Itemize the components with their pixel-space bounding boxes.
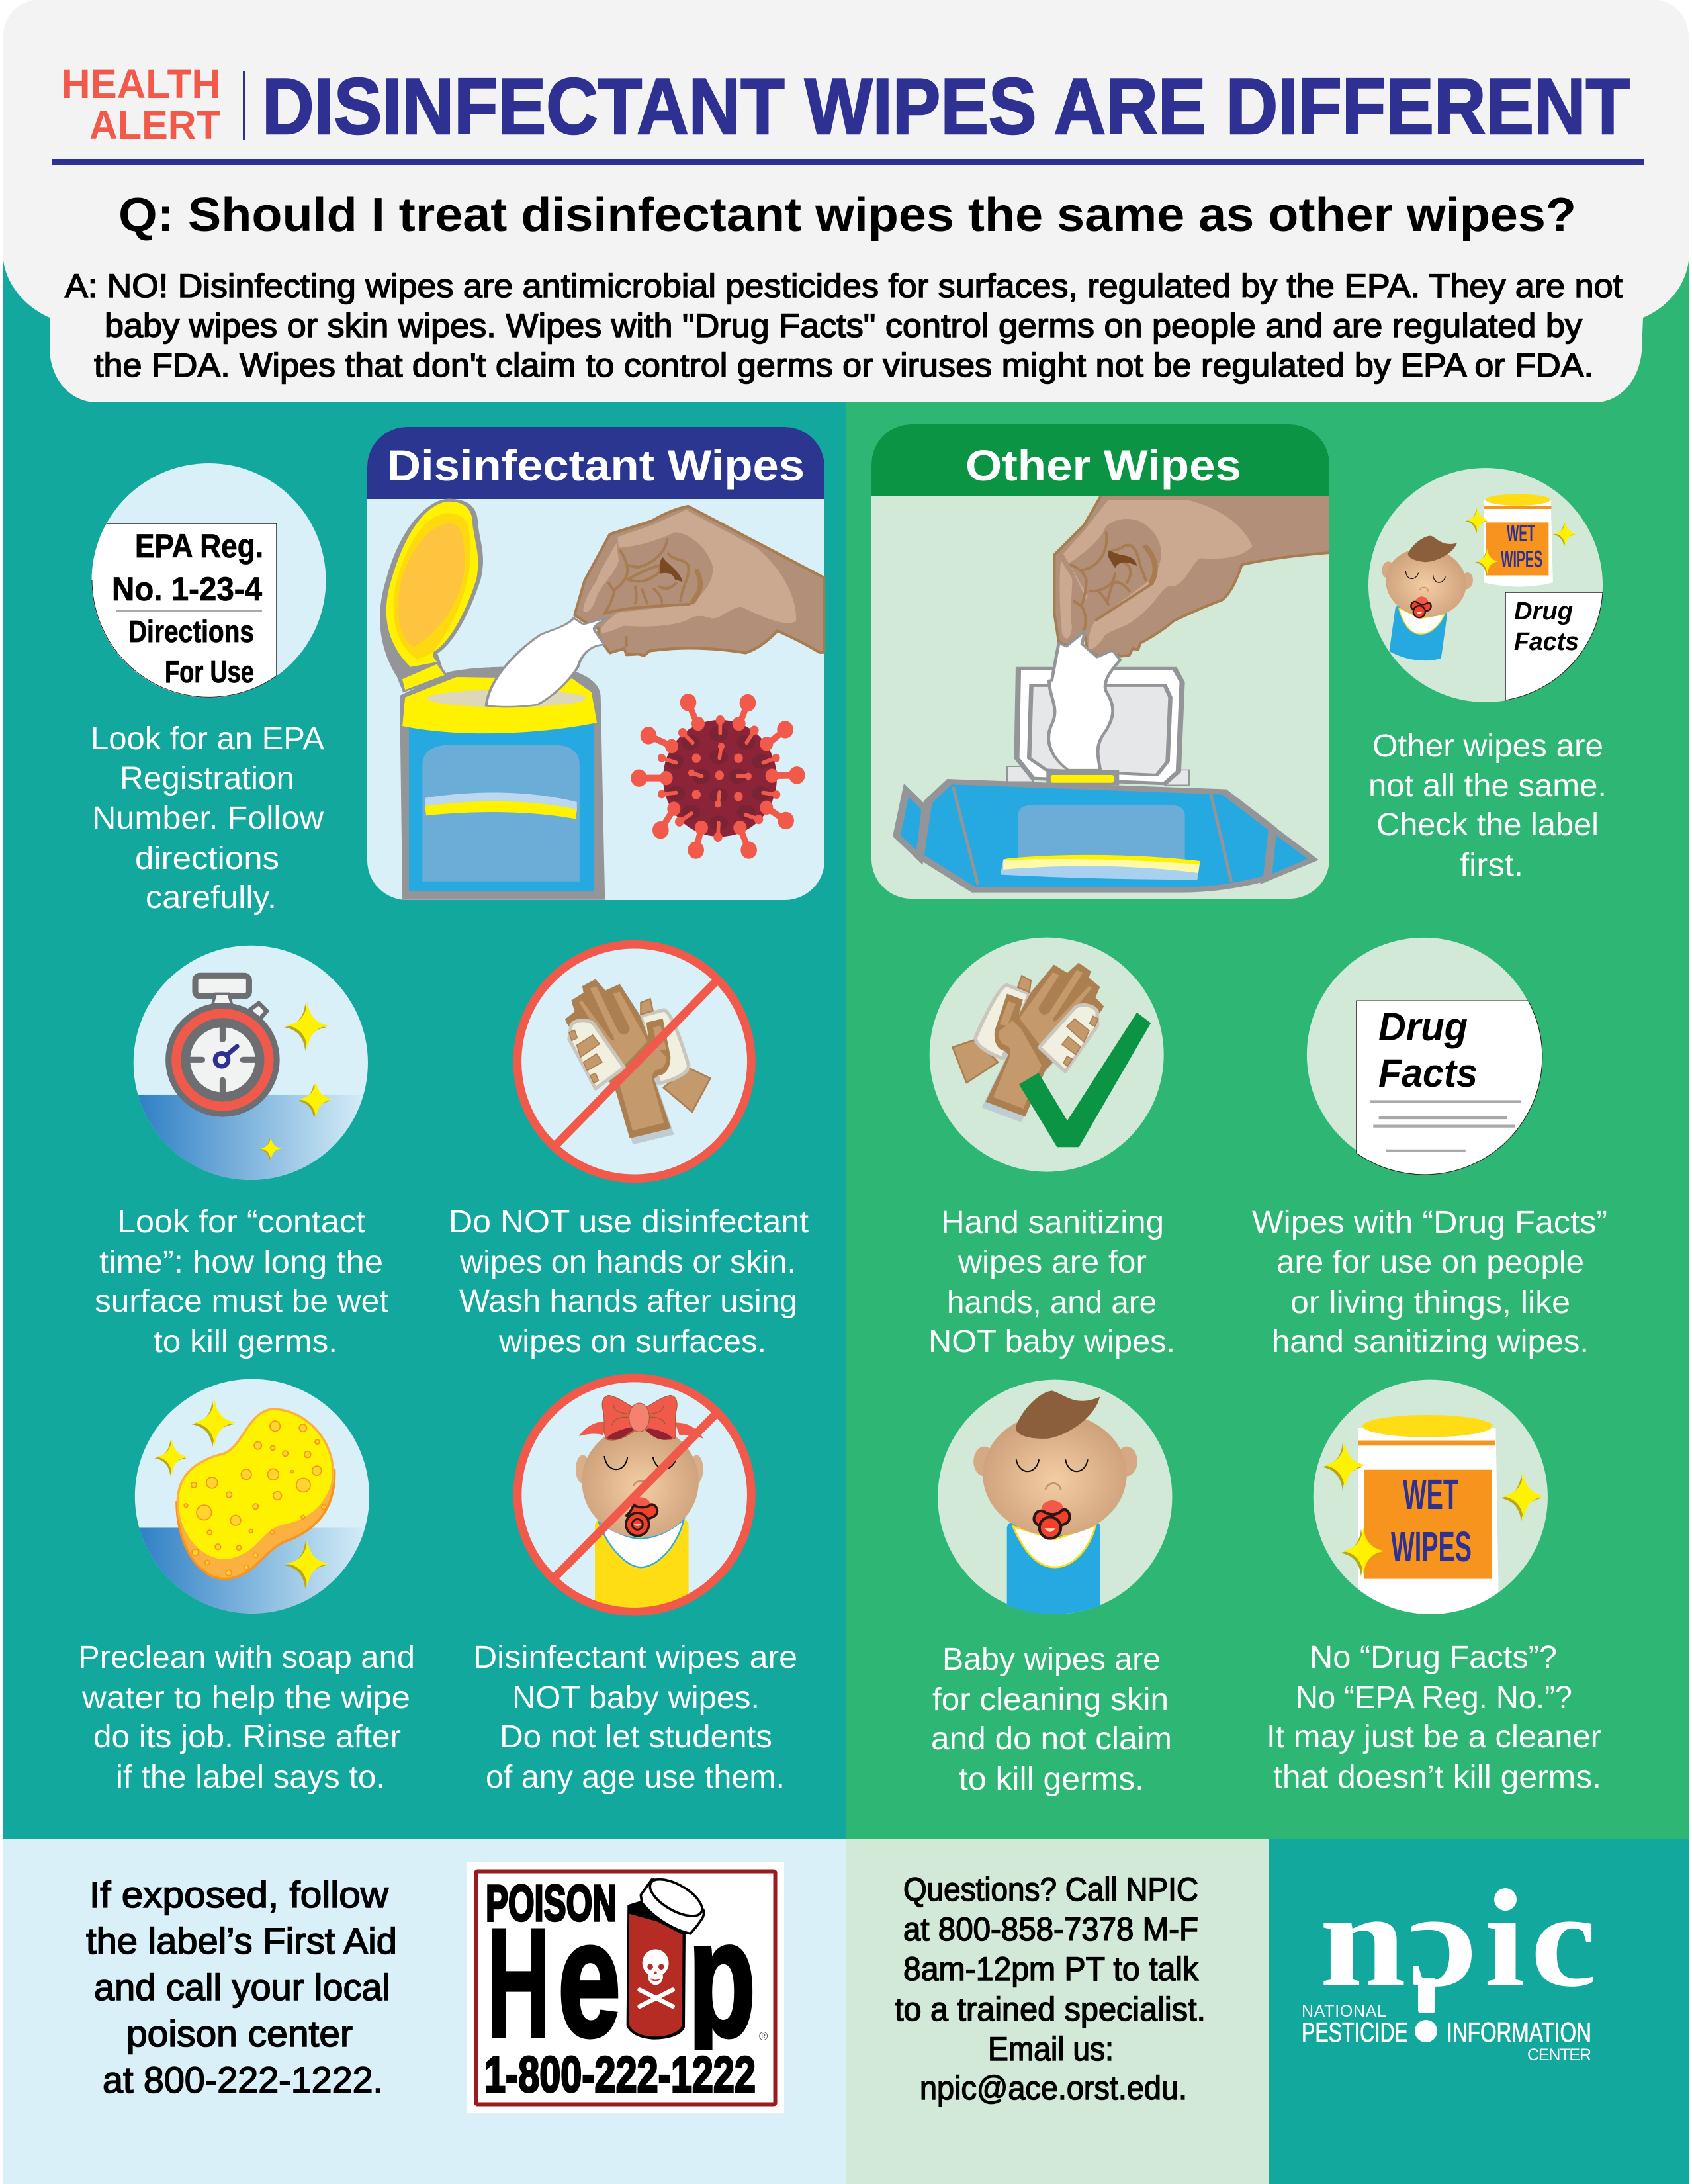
text: no drug facts: No “EPA Reg. No.”? xyxy=(1296,1680,1572,1715)
illustration: virus xyxy=(631,694,805,859)
drug facts sheet: Drug xyxy=(1514,598,1573,625)
illustration: wipes pack xyxy=(897,668,1313,889)
text: EPA registration: Number. Follow xyxy=(92,801,324,836)
text: drug facts wipes: hand sanitizing wipes. xyxy=(1272,1324,1589,1359)
logo: organisation name: NATIONAL xyxy=(1302,2002,1386,2021)
logo: organisation name xyxy=(1302,2002,1591,2064)
text: hand sanitizing: Hand sanitizing xyxy=(941,1205,1164,1240)
text: baby wipes: Baby wipes are xyxy=(942,1642,1161,1677)
panel heading: disinfectant wipes: Disinfectant Wipes xyxy=(387,441,805,490)
text: drug facts wipes xyxy=(1252,1205,1607,1359)
text: preclean: water to help the wipe xyxy=(81,1680,410,1715)
footer panel: NPIC logo xyxy=(1269,1839,1689,2184)
icon: sponge xyxy=(131,1379,373,1616)
text: first aid: the label’s First Aid xyxy=(86,1920,397,1962)
wet wipes jar xyxy=(1465,494,1576,587)
text: drug facts wipes: Wipes with “Drug Facts” xyxy=(1252,1205,1607,1240)
logo: npic wordmark: ı xyxy=(1484,1865,1525,2015)
text: not on hands xyxy=(449,1205,809,1359)
text: first aid xyxy=(86,1874,397,2101)
logo: organisation name: PESTICIDE xyxy=(1302,2017,1408,2048)
icon: drug facts sheet: Drug xyxy=(1378,1005,1468,1049)
text: drug facts wipes: are for use on people xyxy=(1276,1245,1584,1280)
logo: npic wordmark xyxy=(1319,1865,1597,2015)
text: other wipes xyxy=(1368,729,1607,883)
illustration: hand xyxy=(574,506,824,656)
text: contact NPIC: Email us: xyxy=(988,2030,1114,2068)
text: contact NPIC: at 800-858-7378 M-F xyxy=(903,1911,1198,1948)
text: no drug facts: It may just be a cleaner xyxy=(1267,1719,1601,1754)
text: contact time: time”: how long the xyxy=(99,1245,383,1280)
text: hand sanitizing: NOT baby wipes. xyxy=(928,1324,1175,1359)
baby xyxy=(1370,529,1478,666)
text: first aid: and call your local xyxy=(94,1966,390,2008)
text: not baby wipes: Do not let students xyxy=(500,1719,772,1754)
logo: poison help: 1-800-222-1222 xyxy=(484,2046,756,2103)
text: other wipes: Check the label xyxy=(1376,807,1599,842)
page background panels xyxy=(3,199,1689,1840)
text: not on hands: Do NOT use disinfectant xyxy=(449,1205,809,1240)
wet wipes jar: WIPES xyxy=(1501,545,1542,572)
icon: EPA registration label: Directions xyxy=(128,614,254,649)
text: contact time xyxy=(95,1205,388,1359)
panel: other wipes xyxy=(871,424,1329,899)
health alert label: ALERT xyxy=(89,103,220,148)
panel heading: other wipes xyxy=(871,424,1329,496)
text: drug facts wipes: or living things, like xyxy=(1290,1285,1570,1320)
icon: wet wipes jar: WET xyxy=(1403,1471,1458,1518)
answer text: baby wipes or skin wipes. Wipes with "Drug Facts" control germs on people and are regulated by xyxy=(105,307,1582,344)
text: other wipes: first. xyxy=(1460,848,1523,883)
icon: stopwatch xyxy=(131,946,370,1183)
text: first aid: at 800-222-1222. xyxy=(103,2059,383,2101)
text: other wipes: Other wipes are xyxy=(1372,729,1603,764)
wet wipes jar: WET xyxy=(1507,520,1535,547)
icon: baby, wet wipes and drug facts xyxy=(1368,468,1603,702)
question: Q: Should I treat disinfectant wipes the same as other wipes? xyxy=(118,189,1576,242)
logo: npic wordmark: c xyxy=(1531,1865,1597,2015)
text: no drug facts xyxy=(1267,1640,1601,1795)
text: not on hands: wipes on surfaces. xyxy=(498,1324,766,1359)
logo: organisation name: CENTER xyxy=(1527,2046,1591,2064)
panel: disinfectant wipes xyxy=(367,427,824,900)
panel heading: other wipes: Other Wipes xyxy=(965,441,1241,490)
illustration: wipe xyxy=(486,617,607,707)
icon: baby xyxy=(938,1380,1172,1614)
text: hand sanitizing: hands, and are xyxy=(947,1285,1157,1320)
text: not on hands: Wash hands after using xyxy=(459,1284,797,1319)
health alert label xyxy=(62,62,220,148)
icon: EPA registration label: EPA Reg. xyxy=(135,527,263,565)
text: baby wipes: for cleaning skin xyxy=(932,1682,1169,1717)
text: contact time: Look for “contact xyxy=(117,1205,365,1240)
illustration: wipe xyxy=(1049,631,1120,770)
logo: poison help: e xyxy=(558,1886,621,2071)
text: not on hands: wipes on hands or skin. xyxy=(459,1245,796,1280)
icon: EPA registration label xyxy=(91,463,326,698)
text: baby wipes xyxy=(931,1642,1172,1797)
logo: poison help: POISON xyxy=(486,1875,617,1932)
drug facts sheet xyxy=(1505,592,1603,700)
panel heading: disinfectant wipes xyxy=(367,427,824,499)
logo: npic wordmark: ɔ xyxy=(1407,1865,1477,2015)
text: contact NPIC: 8am-12pm PT to talk xyxy=(903,1950,1199,1987)
text: baby wipes: to kill germs. xyxy=(959,1762,1144,1797)
text: no drug facts: No “Drug Facts”? xyxy=(1310,1640,1557,1675)
text: other wipes: not all the same. xyxy=(1368,768,1607,803)
text: no drug facts: that doesn’t kill germs. xyxy=(1273,1760,1601,1795)
icon: hand sanitizing check xyxy=(930,938,1164,1172)
text: EPA registration: Look for an EPA xyxy=(91,721,324,756)
text: not baby wipes xyxy=(473,1640,797,1795)
icon: EPA registration label: For Use xyxy=(165,655,254,689)
text: preclean xyxy=(78,1640,415,1795)
text: first aid: poison center xyxy=(126,2013,353,2054)
text: preclean: do its job. Rinse after xyxy=(93,1719,401,1754)
text: preclean: Preclean with soap and xyxy=(78,1640,415,1675)
logo: poison help: ® xyxy=(759,2030,768,2043)
text: EPA registration xyxy=(91,721,324,915)
logo: poison help xyxy=(467,1862,784,2113)
text: preclean: if the label says to. xyxy=(116,1760,385,1795)
text: baby wipes: and do not claim xyxy=(931,1721,1172,1756)
icon: wet wipes jar xyxy=(1314,1380,1548,1618)
text: not baby wipes: Disinfectant wipes are xyxy=(473,1640,797,1675)
illustration: canister xyxy=(380,499,605,900)
answer text xyxy=(65,267,1623,384)
text: EPA registration: Registration xyxy=(120,761,294,796)
text: contact time: to kill germs. xyxy=(154,1324,337,1359)
text: not baby wipes: NOT baby wipes. xyxy=(512,1680,760,1715)
text: contact NPIC: to a trained specialist. xyxy=(895,1991,1206,2028)
footer panel: questions xyxy=(846,1839,1269,2184)
text: EPA registration: directions xyxy=(135,841,279,876)
answer text: A: NO! Disinfecting wipes are antimicrobial pesticides for surfaces, regulated by the EPA. They are not xyxy=(65,267,1623,304)
icon: drug facts sheet xyxy=(1307,938,1552,1187)
icon: no disinfectant wipes on hands xyxy=(517,944,751,1179)
text: contact NPIC: npic@ace.orst.edu. xyxy=(920,2070,1187,2107)
text: contact NPIC xyxy=(895,1871,1206,2107)
text: not baby wipes: of any age use them. xyxy=(486,1760,785,1795)
drug facts sheet: Facts xyxy=(1514,628,1579,656)
text: contact time: surface must be wet xyxy=(95,1284,388,1319)
footer panel: first aid xyxy=(3,1839,846,2184)
logo: organisation name: INFORMATION xyxy=(1447,2017,1591,2048)
answer text: the FDA. Wipes that don't claim to control germs or viruses might not be regulated by EPA or FDA. xyxy=(94,347,1593,384)
header panel xyxy=(3,0,1689,402)
illustration: hand xyxy=(1054,496,1329,659)
logo: poison help: p xyxy=(688,1886,756,2071)
health alert label: HEALTH xyxy=(62,62,220,107)
logo: npic wordmark: n xyxy=(1319,1865,1406,2015)
text: EPA registration: carefully. xyxy=(146,880,277,915)
logo: poison help: H xyxy=(486,1895,551,2071)
text: hand sanitizing xyxy=(928,1205,1175,1359)
icon: no disinfectant wipes on babies xyxy=(517,1378,751,1617)
icon: EPA registration label: No. 1-23-4 xyxy=(112,570,262,608)
icon: wet wipes jar: WIPES xyxy=(1391,1523,1472,1570)
text: hand sanitizing: wipes are for xyxy=(957,1245,1147,1280)
icon: drug facts sheet: Facts xyxy=(1378,1051,1478,1095)
text: first aid: If exposed, follow xyxy=(89,1874,389,1915)
text: contact NPIC: Questions? Call NPIC xyxy=(903,1871,1198,1908)
